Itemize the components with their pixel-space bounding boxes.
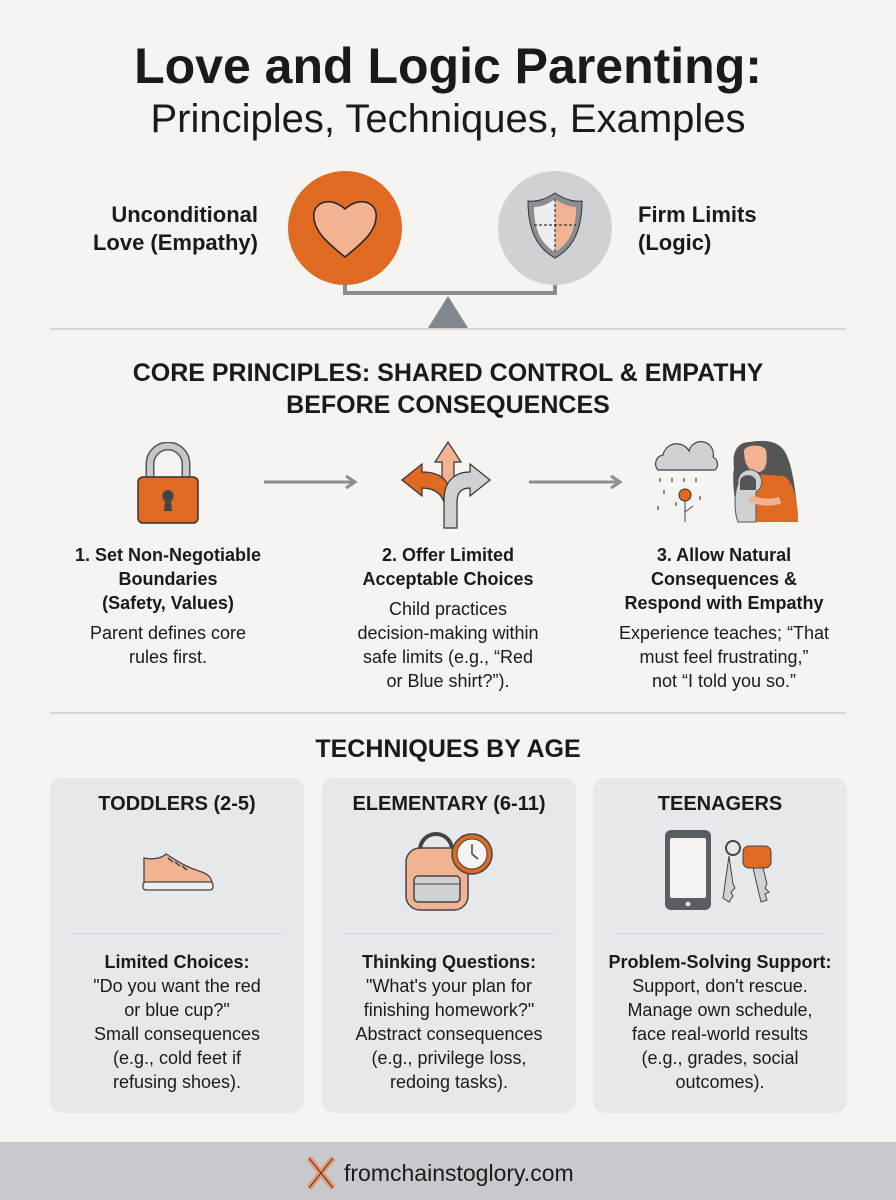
- label: unconditional love: Love (Empathy): [93, 230, 258, 255]
- card: elementary: (e.g., privilege loss,: [371, 1048, 527, 1068]
- card: elementary: redoing tasks).: [390, 1072, 508, 1092]
- card: teenagers: Problem-Solving Support:: [608, 952, 832, 972]
- footer logo and url: [306, 1156, 574, 1190]
- step 2: safe limits (e.g., “Red: [363, 647, 533, 667]
- label: firm limits: Firm Limits: [638, 202, 757, 227]
- step 3: 3. Allow Natural: [657, 545, 791, 565]
- card: teenagers: [593, 778, 847, 1113]
- step 3: Respond with Empathy: [624, 593, 824, 613]
- icon: rain and hug: [654, 440, 798, 522]
- balance scale: [288, 171, 612, 328]
- card: teenagers: Support, don't rescue.: [632, 976, 808, 996]
- footer logo and url: fromchainstoglory.com: [344, 1160, 574, 1186]
- step 3: must feel frustrating,”: [639, 647, 809, 667]
- title: Principles, Techniques, Examples: [150, 97, 746, 141]
- footer: [0, 1142, 896, 1200]
- icon: fork arrows: [401, 441, 491, 529]
- step 3: Consequences &: [651, 569, 797, 589]
- title: [134, 38, 762, 141]
- label: firm limits: [638, 202, 757, 255]
- step 1: rules first.: [129, 647, 207, 667]
- step 2: decision-making within: [357, 623, 539, 643]
- title: Love and Logic Parenting:: [134, 38, 762, 94]
- heading: core principles: CORE PRINCIPLES: SHARED CONTROL & EMPATHY: [133, 359, 763, 387]
- card: elementary: "What's your plan for: [366, 976, 532, 996]
- label: unconditional love: [93, 202, 258, 255]
- step 1: [75, 545, 261, 667]
- step 2: [357, 545, 539, 691]
- card: toddlers: Limited Choices:: [104, 952, 250, 972]
- step 2: 2. Offer Limited: [382, 545, 514, 565]
- card: elementary: ELEMENTARY (6-11): [352, 793, 546, 815]
- card: toddlers: "Do you want the red: [93, 976, 261, 996]
- step 2: Child practices: [389, 599, 507, 619]
- card: toddlers: or blue cup?": [124, 1000, 230, 1020]
- step 1: Parent defines core: [90, 623, 246, 643]
- card: toddlers: refusing shoes).: [113, 1072, 241, 1092]
- card: elementary: Thinking Questions:: [362, 952, 536, 972]
- step 2: Acceptable Choices: [362, 569, 534, 589]
- card: teenagers: outcomes).: [675, 1072, 765, 1092]
- step 1: 1. Set Non-Negotiable: [75, 545, 261, 565]
- heading: techniques by age: TECHNIQUES BY AGE: [315, 735, 581, 763]
- arrow 2: [529, 474, 622, 490]
- step 3: not “I told you so.”: [652, 671, 796, 691]
- card: toddlers: TODDLERS (2-5): [98, 793, 256, 815]
- icon: phone and keys: [665, 830, 772, 910]
- card: elementary: [322, 778, 576, 1113]
- icon: shield circle: [498, 171, 612, 285]
- card: elementary: finishing homework?": [364, 1000, 534, 1020]
- step 1: Boundaries: [118, 569, 218, 589]
- arrow 1: [264, 474, 358, 490]
- step 1: (Safety, Values): [102, 593, 234, 613]
- card: teenagers: face real-world results: [632, 1024, 808, 1044]
- card: elementary: Abstract consequences: [355, 1024, 543, 1044]
- icon: shoe: [142, 853, 214, 891]
- card: teenagers: Manage own schedule,: [627, 1000, 813, 1020]
- icon: backpack and clock: [405, 832, 493, 911]
- heading: core principles: BEFORE CONSEQUENCES: [286, 391, 610, 419]
- step 3: Experience teaches; “That: [619, 623, 829, 643]
- card: toddlers: [50, 778, 304, 1113]
- card: toddlers: (e.g., cold feet if: [113, 1048, 241, 1068]
- heading: core principles: [133, 359, 763, 419]
- step 3: [619, 545, 829, 691]
- card: toddlers: Small consequences: [94, 1024, 260, 1044]
- label: firm limits: (Logic): [638, 230, 711, 255]
- label: unconditional love: Unconditional: [111, 202, 258, 227]
- step 2: or Blue shirt?”).: [386, 671, 510, 691]
- card: teenagers: TEENAGERS: [658, 793, 782, 815]
- icon: heart circle: [288, 171, 402, 285]
- icon: padlock: [137, 442, 199, 524]
- card: teenagers: (e.g., grades, social: [641, 1048, 799, 1068]
